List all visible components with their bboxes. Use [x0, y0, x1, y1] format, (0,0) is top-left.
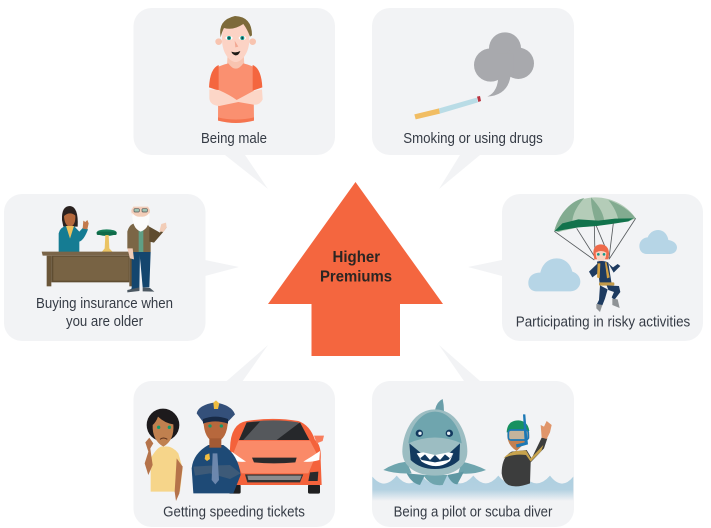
panel: risky activities	[468, 194, 703, 341]
label: smoking: Smoking or using drugs	[403, 130, 543, 147]
central arrow: higher premiums: Premiums	[320, 268, 392, 286]
icon: woman at desk and old man	[42, 201, 167, 292]
label: speeding tickets: Getting speeding tickets	[163, 504, 305, 521]
panel: buying insurance when older	[4, 194, 239, 341]
panel: speeding tickets	[134, 345, 335, 527]
icon: parachutist and clouds	[528, 197, 677, 312]
label: risky activities: Participating in risky activities	[516, 314, 690, 331]
icon: man with crossed arms	[209, 16, 263, 123]
icon: cigarette and smoke	[414, 32, 534, 119]
central arrow: higher premiums	[268, 182, 443, 356]
icon: scuba diver	[502, 414, 552, 486]
label: buying insurance: Buying insurance when	[36, 295, 173, 312]
label: buying insurance: you are older	[66, 313, 143, 330]
central arrow: higher premiums: Higher	[333, 249, 380, 266]
panel: pilot or scuba diver	[372, 345, 574, 527]
label: pilot or scuba diver: Being a pilot or scuba diver	[394, 504, 552, 521]
panel: smoking	[372, 8, 574, 189]
panel: being male	[134, 8, 335, 189]
icon: shark	[383, 399, 486, 485]
icon: water band	[372, 399, 573, 501]
icon: woman, police officer and car	[145, 400, 324, 501]
label: being male: Being male	[201, 130, 267, 147]
